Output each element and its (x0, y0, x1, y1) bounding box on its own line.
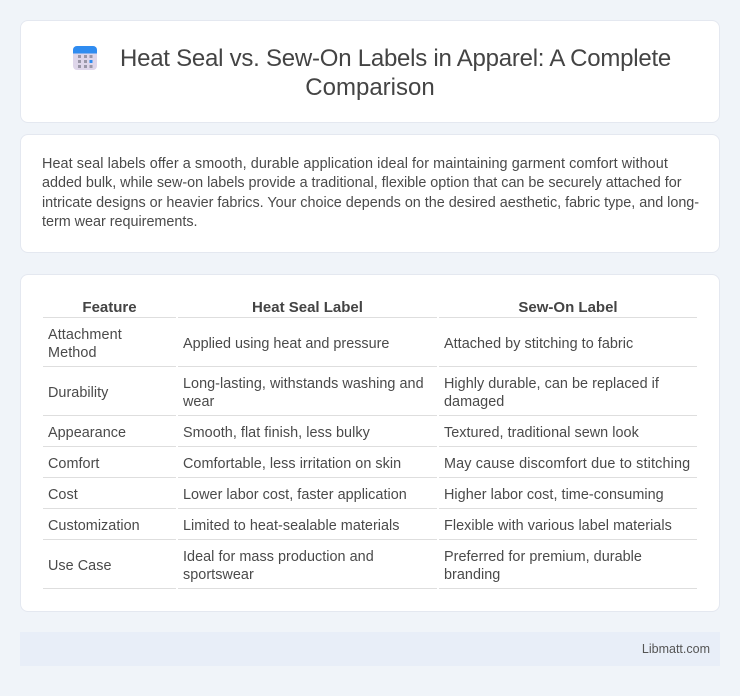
row: customization: Customization (48, 518, 140, 534)
comparison table: Attached by stitching to fabric (444, 336, 633, 352)
comparison table: Highly durable, can be replaced if (444, 376, 659, 392)
comparison table: branding (444, 567, 500, 583)
footer bar (20, 632, 720, 666)
row: durability: Durability (48, 385, 108, 401)
text block: intro: added bulk, while sew-on labels provide a traditional, flexible option that can be securely attached for (42, 175, 682, 191)
comparison table: Smooth, flat finish, less bulky (183, 425, 370, 441)
comparison table: Lower labor cost, faster application (183, 487, 407, 503)
row: attachment method: Attachment (48, 327, 122, 343)
row: cost: Cost (48, 487, 78, 503)
comparison table: May cause discomfort due to stitching (444, 456, 690, 472)
comparison table: Long-lasting, withstands washing and (183, 376, 424, 392)
comparison table: Flexible with various label materials (444, 518, 672, 534)
comparison table: Ideal for mass production and (183, 549, 374, 565)
panel: intro text card (20, 134, 720, 253)
comparison table: Limited to heat-sealable materials (183, 518, 400, 534)
comparison table: wear (183, 394, 214, 410)
panel: comparison table card (20, 274, 720, 612)
comparison table: Preferred for premium, durable (444, 549, 642, 565)
comparison table: Textured, traditional sewn look (444, 425, 639, 441)
row: attachment method (48, 327, 122, 361)
comparison table: Comfortable, less irritation on skin (183, 456, 401, 472)
comparison table: Higher labor cost, time-consuming (444, 487, 664, 503)
comparison table: damaged (444, 394, 504, 410)
text block: intro: term wear requirements. (42, 214, 198, 230)
comparison table: sportswear (183, 567, 254, 583)
text block: intro: intricate designs or heavier fabrics. Your choice depends on the desired aesthetic, fabric type, and long- (42, 195, 699, 211)
text block: intro: Heat seal labels offer a smooth, durable application ideal for maintaining garment comfort without (42, 156, 668, 172)
row: comfort: Comfort (48, 456, 99, 472)
title: Comparison (305, 74, 435, 101)
title: Heat Seal vs. Sew-On Labels in Apparel: A Complete (120, 45, 671, 72)
footer text: Libmatt.com (642, 642, 710, 656)
column header: Heat Seal Label: Heat Seal Label (252, 299, 363, 316)
icon: calendar (73, 46, 97, 70)
row: appearance: Appearance (48, 425, 126, 441)
comparison table: Applied using heat and pressure (183, 336, 389, 352)
column header: Sew-On Label: Sew-On Label (518, 299, 618, 316)
row: use case: Use Case (48, 558, 112, 574)
column header: Feature: Feature (82, 299, 137, 316)
title (120, 45, 671, 101)
row: attachment method: Method (48, 345, 97, 361)
text block: intro (42, 156, 699, 230)
panel: title card (20, 20, 720, 123)
